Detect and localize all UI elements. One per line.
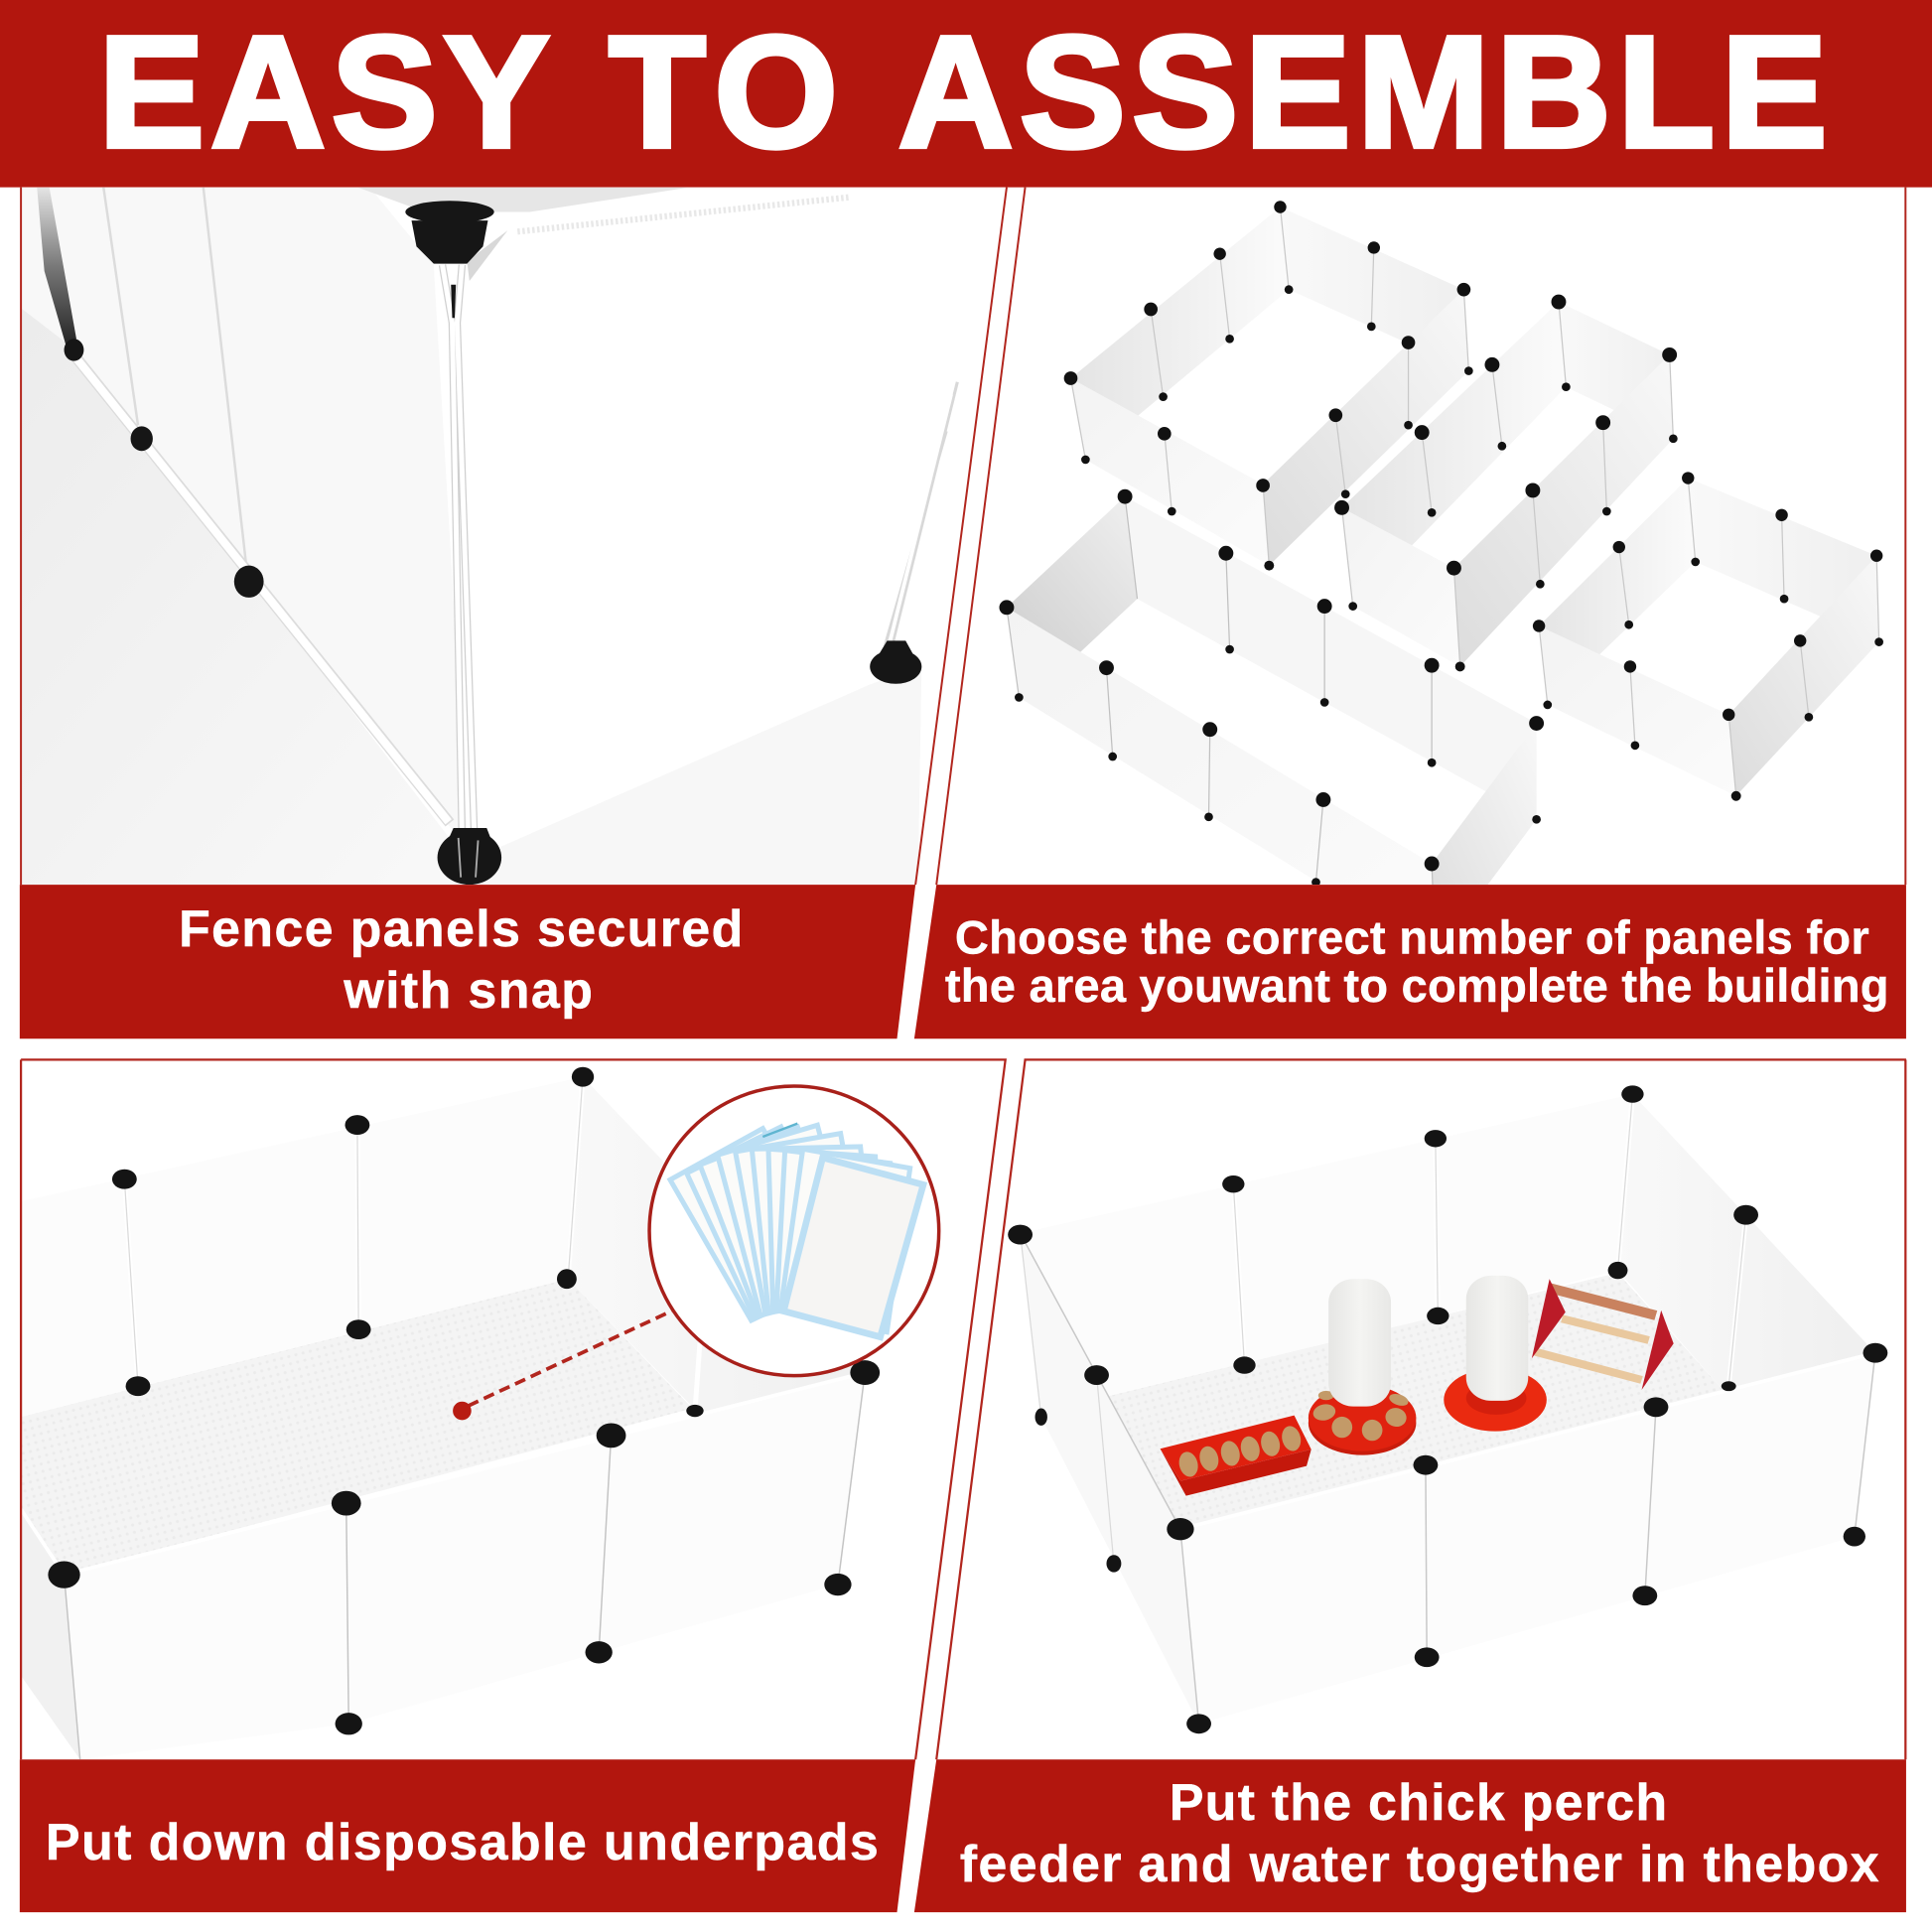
caption text: with snap — [343, 962, 593, 1020]
panel: chick perch, feeder and water — [914, 1059, 1906, 1912]
icon: wooden perch — [1532, 1279, 1674, 1390]
enclosure right — [1533, 472, 1883, 801]
caption text — [179, 900, 743, 1020]
panel frame — [21, 188, 1007, 885]
caption text: the area youwant to complete the building — [945, 959, 1889, 1012]
enclosure top — [1064, 201, 1473, 571]
panel: choose number of panels — [914, 188, 1906, 1038]
connectors — [48, 1067, 880, 1734]
photo: enclosure with accessories — [1008, 1059, 1906, 1759]
back wall — [21, 1077, 583, 1417]
panel: put down disposable underpads — [20, 1059, 1007, 1912]
title text: TO — [609, 3, 838, 181]
panel frame — [936, 1059, 1906, 1759]
front wall — [1180, 1353, 1875, 1724]
left wall — [21, 1509, 80, 1759]
panel: fence panels secured with snap — [20, 188, 1007, 1038]
caption text: Fence panels secured — [179, 900, 743, 958]
callout circle with stack of underpads — [649, 1086, 939, 1376]
side wall — [627, 1128, 853, 1412]
photo: close-up of corner snap — [21, 188, 1007, 885]
connector: top snap — [405, 201, 494, 318]
icon: chick water drinker — [1444, 1276, 1547, 1432]
caption band — [914, 1759, 1906, 1912]
title text: ASSEMBLE — [898, 3, 1828, 181]
enclosure middle — [1334, 295, 1678, 671]
title text: EASY — [98, 3, 550, 181]
icon: fan of underpads — [670, 1124, 923, 1337]
icon: round chick feeder — [1309, 1279, 1416, 1455]
title banner — [0, 0, 1932, 188]
photo: enclosure with underpad on floor — [22, 1066, 880, 1759]
caption band — [20, 885, 915, 1038]
accessories: trough, feeder, drinker, perch — [1161, 1276, 1674, 1496]
enclosure lower — [999, 488, 1545, 885]
panel frame — [936, 188, 1905, 885]
floor underpad — [21, 1279, 692, 1575]
caption text: Put the chick perch — [1170, 1774, 1667, 1832]
callout line — [453, 1311, 671, 1420]
caption text: Put down disposable underpads — [46, 1814, 879, 1871]
caption band — [914, 885, 1906, 1038]
caption text — [945, 911, 1889, 1012]
title text — [98, 3, 1828, 181]
floor — [1109, 1273, 1725, 1529]
caption text: feeder and water together in thebox — [960, 1836, 1879, 1893]
photo: four fence enclosures — [1000, 188, 1906, 955]
caption band — [20, 1759, 915, 1912]
panel frame — [21, 1059, 1006, 1759]
rods at corner — [443, 265, 475, 838]
caption text — [960, 1774, 1879, 1893]
connectors: floor snaps — [65, 339, 921, 885]
back walls — [1021, 1094, 1632, 1417]
caption text: Choose the correct number of panels for — [955, 911, 1869, 964]
left wall — [1021, 1233, 1199, 1724]
icon: red trough feeder — [1161, 1416, 1311, 1496]
connectors — [1008, 1085, 1887, 1733]
front wall — [719, 1404, 749, 1412]
